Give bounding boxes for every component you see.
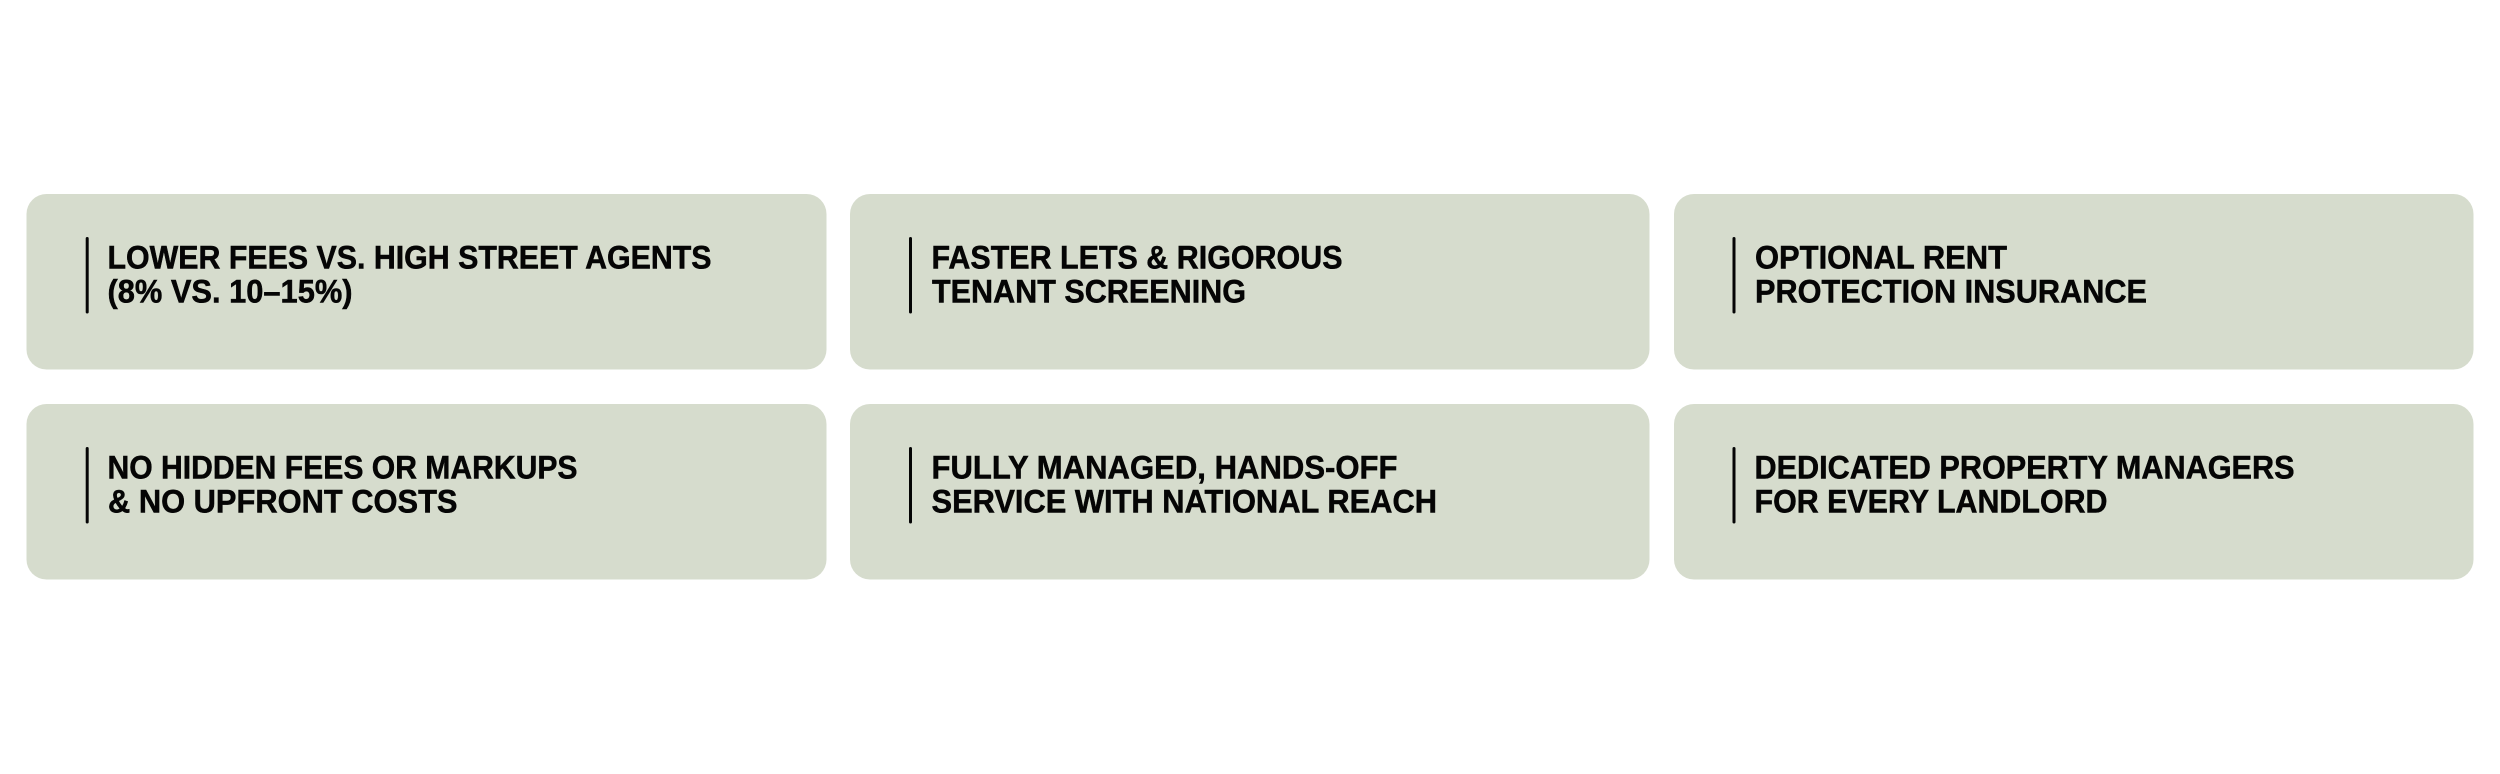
text: rent protection: OPTIONAL RENT <box>1755 240 2007 276</box>
panel: lower fees <box>26 194 826 370</box>
text: dedicated managers: DEDICATED PROPERTY MANAGERS <box>1754 450 2294 486</box>
text: faster lets <box>932 240 1342 310</box>
text: dedicated managers <box>1754 450 2294 520</box>
text: lower fees: LOWER FEES VS. HIGH STREET AGENTS <box>108 240 712 276</box>
text: fully managed: FULLY MANAGED, HANDS-OFF <box>932 450 1398 486</box>
accent bar <box>909 447 912 524</box>
panel: fully managed <box>850 404 1650 580</box>
text: faster lets: TENANT SCREENING <box>932 274 1246 310</box>
text: no hidden fees: & NO UPFRONT COSTS <box>108 484 458 520</box>
text: rent protection: PROTECTION INSURANCE <box>1755 274 2147 310</box>
text: faster lets: FASTER LETS & RIGOROUS <box>932 240 1342 276</box>
accent bar <box>909 237 912 314</box>
text: fully managed: SERVICE WITH NATIONAL REACH <box>932 484 1437 520</box>
text: fully managed <box>932 450 1437 520</box>
accent bar <box>86 447 89 524</box>
text: lower fees <box>108 240 712 310</box>
panel: dedicated managers <box>1674 404 2474 580</box>
text: dedicated managers: FOR EVERY LANDLORD <box>1754 484 2108 520</box>
accent bar <box>1732 237 1736 314</box>
text: lower fees: (8% VS. 10–15%) <box>108 274 352 310</box>
panel: no hidden fees <box>26 404 826 580</box>
text: rent protection <box>1755 240 2147 310</box>
text: no hidden fees <box>108 450 578 520</box>
panel: rent protection <box>1674 194 2474 370</box>
panel: faster lets <box>850 194 1650 370</box>
accent bar <box>1732 447 1736 524</box>
accent bar <box>86 237 89 314</box>
text: no hidden fees: NO HIDDEN FEES OR MARKUPS <box>108 450 578 486</box>
